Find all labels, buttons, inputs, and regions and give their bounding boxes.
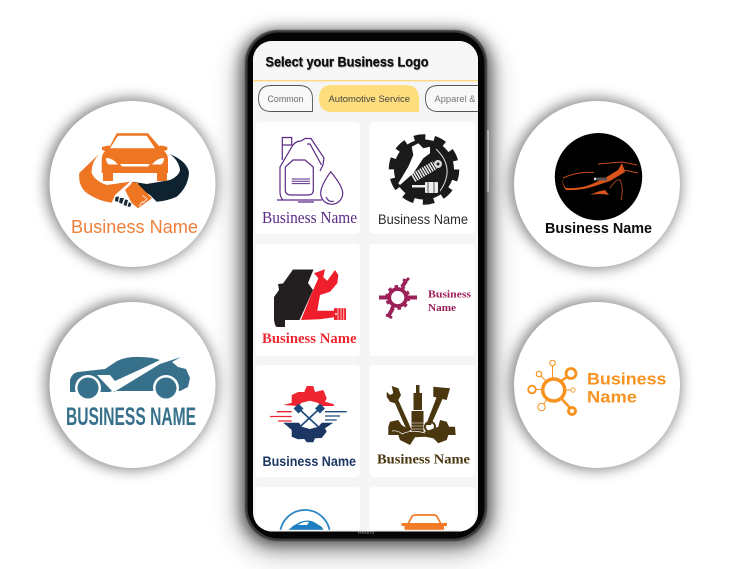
icon: black gear with wrench bbox=[392, 138, 456, 201]
icon: two tone gear with pistons bbox=[270, 386, 347, 442]
icon: oil jug and drop bbox=[277, 138, 343, 204]
card: maroon gear logo: Name bbox=[428, 303, 456, 314]
card: blue circular car logo bbox=[256, 487, 360, 532]
tab: Apparel bbox=[425, 85, 478, 112]
card: maroon gear logo bbox=[370, 244, 475, 356]
card: oil can logo: Business Name bbox=[262, 208, 357, 227]
badge: orange network logo: Name bbox=[587, 388, 637, 406]
icon: tools in gear bbox=[387, 385, 456, 445]
header bbox=[253, 41, 478, 81]
card: gear and wrench logo: Business Name bbox=[378, 211, 468, 227]
card: maroon gear logo: Business bbox=[428, 290, 471, 300]
icon: maroon gear bbox=[379, 278, 417, 318]
icon: car with handshake: Business Name bbox=[71, 216, 198, 237]
icon: car with checkmark bbox=[66, 357, 196, 431]
icon: car with handshake bbox=[71, 133, 198, 237]
header: Select your Business Logo bbox=[266, 54, 428, 70]
badge: black circle sports car bbox=[510, 98, 680, 268]
bottom navigation edge bbox=[253, 530, 478, 532]
tab: Automotive Service: Automotive Service bbox=[328, 94, 410, 105]
card: oil can logo bbox=[256, 122, 360, 234]
icon: car silhouette bbox=[274, 270, 314, 327]
category tabs bbox=[258, 85, 490, 112]
badge: orange car and handshake bbox=[46, 98, 216, 268]
card: car and wrench logo: Business Name bbox=[262, 331, 357, 347]
icon: orange car roof bbox=[402, 515, 447, 531]
tab: Common: Common bbox=[268, 94, 304, 105]
header: Select your Business Logo bbox=[266, 56, 429, 70]
badge: teal car with check bbox=[46, 300, 216, 470]
tab: Apparel: Apparel & bbox=[434, 94, 476, 105]
phone side button bbox=[486, 130, 489, 192]
tab: Automotive Service bbox=[319, 85, 419, 112]
badge: black circle sports car: Business Name bbox=[545, 221, 652, 237]
icon: red wrench and piston bbox=[301, 269, 346, 320]
card: car and wrench logo bbox=[256, 244, 360, 356]
phone mockup bbox=[240, 30, 492, 560]
card: red and blue gear logo: Business Name bbox=[262, 453, 356, 469]
card: gear and wrench logo bbox=[370, 122, 475, 234]
icon: black disc bbox=[555, 133, 642, 220]
icon: blue ring with car bbox=[280, 509, 330, 530]
badge: orange network logo: Business bbox=[587, 370, 666, 388]
badge: orange network logo bbox=[510, 300, 680, 470]
phone body bbox=[245, 30, 487, 541]
brand mark: Redmi bbox=[358, 530, 374, 536]
card: red and blue gear logo bbox=[256, 365, 360, 477]
app screen bbox=[253, 41, 478, 532]
icon: network nodes bbox=[528, 360, 576, 414]
card: brown tools logo: Business Name bbox=[377, 452, 470, 468]
phone bezel bbox=[248, 32, 484, 538]
card: brown tools logo bbox=[370, 365, 475, 477]
phone shadow bbox=[240, 30, 492, 552]
icon: car with checkmark: BUSINESS NAME bbox=[66, 403, 196, 431]
tab: Common bbox=[258, 86, 312, 112]
icon: orange car outline bbox=[562, 162, 638, 200]
card: orange car logo bbox=[370, 487, 475, 532]
